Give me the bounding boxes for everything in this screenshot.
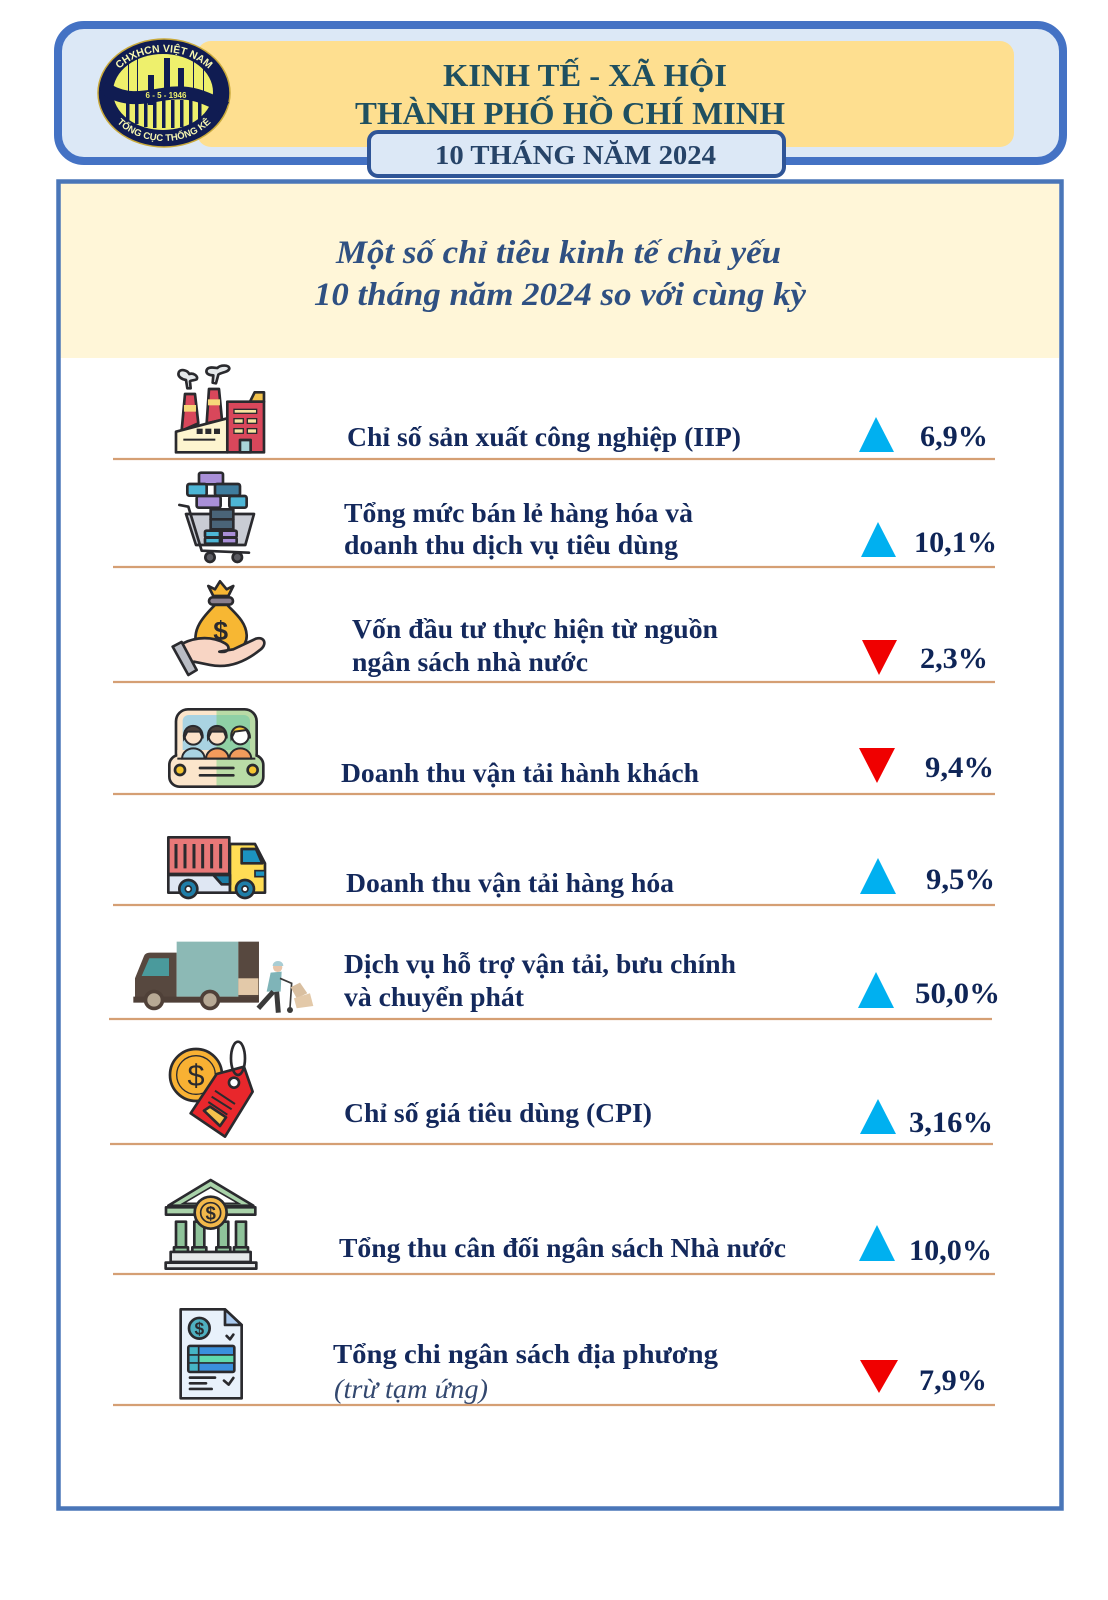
value: 10,1% [914,526,997,559]
label: Chỉ số sản xuất công nghiệp (IIP) [347,422,741,452]
label [344,949,736,1012]
header frame [58,25,1063,161]
decrease arrow [859,748,895,783]
row: freight transport [168,837,995,898]
label [352,614,718,677]
icon: shopping cart [179,473,254,562]
logo: statistics office seal: 6 - 5 - 1946 [146,91,187,100]
period badge [369,132,784,176]
value: 9,4% [925,751,994,784]
panel heading [314,235,806,313]
label: doanh thu dịch vụ tiêu dùng [344,530,679,560]
label: (trừ tạm ứng) [334,1374,488,1404]
label: Tổng thu cân đối ngân sách Nhà nước [339,1233,786,1263]
decrease arrow [862,640,897,675]
period badge: 10 THÁNG NĂM 2024 [435,140,716,170]
row: passenger transport [169,709,994,788]
label: Vốn đầu tư thực hiện từ nguồn [352,614,718,644]
row: transport support and postal services [133,942,1000,1013]
main panel [58,182,1062,1508]
header yellow band [197,41,1014,147]
label: Tổng chi ngân sách địa phương [333,1339,719,1369]
increase arrow [859,417,894,452]
icon: delivery truck and worker [133,942,313,1013]
label: và chuyển phát [344,982,524,1012]
value: 7,9% [919,1364,987,1397]
label: Chỉ số giá tiêu dùng (CPI) [344,1098,652,1128]
row: local budget expenditure [181,1309,987,1404]
row: consumer price index [170,1042,993,1139]
logo: statistics office seal: CHXHCN VIỆT NAM [116,44,213,68]
logo: statistics office seal [97,38,231,148]
icon: financial document [181,1309,242,1398]
value: 50,0% [915,977,1000,1010]
panel heading: Một số chỉ tiêu kinh tế chủ yếu [335,235,781,271]
icon: container truck [168,837,265,898]
label [333,1339,719,1404]
increase arrow [859,1225,895,1261]
panel heading: 10 tháng năm 2024 so với cùng kỳ [314,277,806,313]
value: 6,9% [920,420,988,453]
value: 3,16% [909,1106,993,1139]
icon: bank building [166,1180,256,1269]
header banner [54,21,1067,178]
label: Dịch vụ hỗ trợ vận tải, bưu chính [344,949,736,979]
value: 10,0% [909,1234,992,1267]
icon: coin and price tag [170,1042,253,1137]
icon: factory [176,366,264,452]
row: state budget investment [173,581,988,677]
logo: statistics office seal: TỔNG CỤC THỐNG KÊ [118,118,211,142]
title line 2: THÀNH PHỐ HỒ CHÍ MINH [355,95,785,131]
icon: bank building: $ [205,1202,216,1223]
panel cream header [60,183,1059,358]
increase arrow [860,1099,896,1134]
increase arrow [860,858,896,894]
icon: coin and price tag: $ [187,1059,205,1093]
panel border [58,182,1062,1508]
row: industrial production index [176,366,988,453]
icon: passenger car [169,709,263,787]
value: 2,3% [920,642,988,675]
label: Doanh thu vận tải hàng hóa [346,868,674,898]
increase arrow [858,972,894,1008]
label [344,498,693,560]
label: ngân sách nhà nước [352,647,588,677]
label: Tổng mức bán lẻ hàng hóa và [344,498,693,528]
label: Doanh thu vận tải hành khách [341,758,699,788]
value: 9,5% [926,863,995,896]
icon: money bag on hand: $ [213,616,228,646]
icon: money bag on hand [173,581,264,675]
title line 1: KINH TẾ - XÃ HỘI [443,57,727,93]
increase arrow [861,522,896,557]
decrease arrow [860,1360,898,1393]
row: state budget revenue [166,1180,992,1269]
row: retail sales [179,473,997,562]
icon: financial document: $ [195,1319,205,1339]
